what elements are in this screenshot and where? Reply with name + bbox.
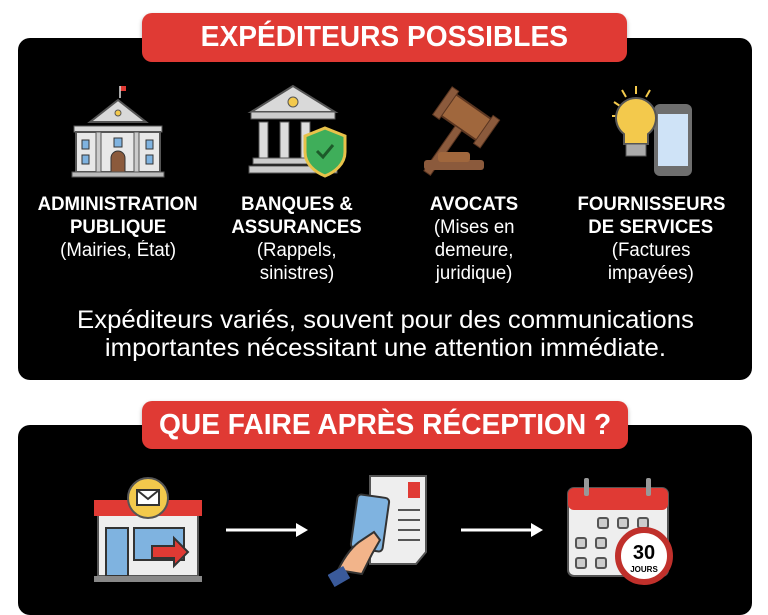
panel: expéditeurs — [18, 38, 752, 380]
arrow 2 — [461, 523, 543, 537]
icon: post office — [94, 477, 202, 582]
heading: expéditeurs possibles: EXPÉDITEURS POSSIBLES — [201, 21, 568, 53]
label: banques — [232, 194, 362, 284]
icon: hand with card and document — [328, 475, 427, 587]
label: banques: BANQUES & — [241, 194, 353, 215]
label: avocats: (Mises en — [434, 217, 514, 238]
label: administration: ADMINISTRATION — [38, 194, 198, 215]
heading: que faire après réception: QUE FAIRE APRÈS RÉCEPTION ? — [159, 409, 611, 441]
panel: que faire — [18, 425, 752, 615]
icon: administration building — [72, 86, 164, 178]
heading: que faire après réception — [142, 401, 628, 449]
label: administration — [38, 194, 198, 261]
label: fournisseurs: impayées) — [608, 263, 694, 284]
label: avocats — [430, 194, 518, 284]
heading: expéditeurs possibles — [142, 13, 627, 62]
arrow 1 — [226, 523, 308, 537]
label: fournisseurs — [577, 194, 725, 284]
label: administration: PUBLIQUE — [70, 217, 166, 238]
label: avocats: juridique) — [436, 263, 512, 284]
icon: calendar 30 jours: JOURS — [630, 565, 658, 574]
label: administration: (Mairies, État) — [60, 240, 176, 261]
label: banques: (Rappels, — [257, 240, 337, 261]
icon: calendar 30 jours: 30 — [633, 542, 655, 564]
text: summary: importantes nécessitant une attention immédiate. — [104, 334, 666, 362]
label: avocats: demeure, — [435, 240, 513, 261]
icon: bulb and phone — [612, 86, 692, 176]
label: fournisseurs: FOURNISSEURS — [577, 194, 725, 215]
label: avocats: AVOCATS — [430, 194, 518, 215]
label: fournisseurs: DE SERVICES — [589, 217, 713, 238]
label: fournisseurs: (Factures — [612, 240, 690, 261]
icon: bank with shield — [248, 85, 346, 178]
label: banques: ASSURANCES — [232, 217, 362, 238]
icon: calendar 30 jours — [567, 478, 673, 585]
text: summary — [77, 306, 693, 362]
text: summary: Expéditeurs variés, souvent pour des communications — [77, 306, 693, 334]
icon: gavel — [423, 86, 500, 176]
label: banques: sinistres) — [260, 263, 334, 284]
